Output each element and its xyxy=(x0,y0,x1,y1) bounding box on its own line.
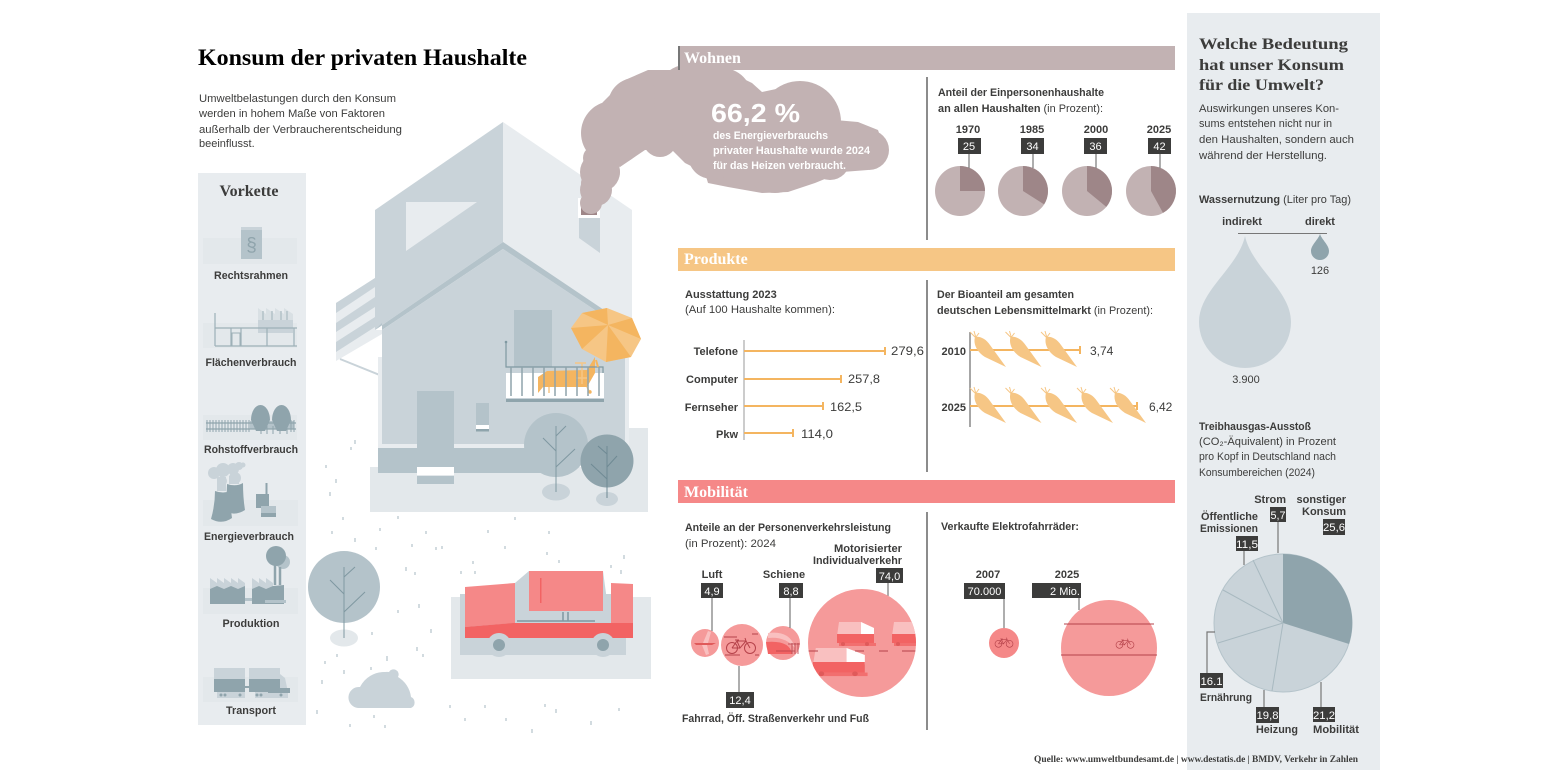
bubble Schiene xyxy=(763,569,805,660)
divider line Mobilität xyxy=(926,512,928,730)
tree small xyxy=(580,434,634,506)
pie 2025: 42 xyxy=(1153,141,1166,153)
carrot chart xyxy=(942,331,1173,427)
label Öffentliche Emissionen: Emissionen xyxy=(1200,523,1258,535)
pie 1985: 34 xyxy=(1026,141,1039,153)
bar Pkw: 114,0 xyxy=(801,427,833,441)
intro text xyxy=(198,93,402,150)
cloud foreground xyxy=(348,669,415,708)
panel intro text xyxy=(1198,103,1354,162)
heading Bioanteil xyxy=(937,289,1153,317)
bubble Luft: 4,9 xyxy=(704,586,720,598)
greenhouse gas text xyxy=(1199,421,1336,479)
back wall left xyxy=(375,122,503,330)
bubble Schiene: Schiene xyxy=(763,569,805,581)
panel intro text: Auswirkungen unseres Kon- xyxy=(1199,103,1339,115)
heading Ausstattung: (Auf 100 Haushalte kommen): xyxy=(685,304,835,316)
bar Telefone xyxy=(694,344,924,358)
icon: Produktion factories xyxy=(203,546,298,614)
pie 1970: 1970 xyxy=(956,124,980,136)
pie 2000 xyxy=(1062,124,1112,216)
bar Fernseher xyxy=(685,400,862,414)
bar chart Ausstattung xyxy=(685,340,924,441)
panel intro text: sums entstehen nicht nur in xyxy=(1199,118,1332,130)
heading Elektrofahrräder: Verkaufte Elektrofahrräder: xyxy=(941,521,1079,533)
panel heading: Welche Bedeutung xyxy=(1199,36,1348,53)
side strip xyxy=(378,357,382,448)
row 2025: 2025 xyxy=(942,402,966,414)
water use chart xyxy=(1199,194,1351,386)
section: Produkte header: Produkte xyxy=(684,251,748,268)
callout: 66,2 %: 66,2 % xyxy=(711,98,800,128)
water use chart: indirekt xyxy=(1222,216,1262,228)
intro text: außerhalb der Verbraucherentscheidung xyxy=(199,124,402,136)
label Strom xyxy=(1254,494,1286,522)
heading Ausstattung: Ausstattung 2023 xyxy=(685,289,777,301)
callout: 66,2 %: privater Haushalte wurde 2024 xyxy=(713,145,871,157)
row 2010 xyxy=(942,331,1114,367)
bar Telefone: 279,6 xyxy=(891,344,924,358)
bubble 2007: 70.000 xyxy=(968,586,1001,598)
bubble 2007 xyxy=(964,569,1019,658)
label sonstiger Konsum xyxy=(1296,494,1347,535)
label sonstiger Konsum: 25,6 xyxy=(1323,522,1345,534)
panel heading: hat unser Konsum xyxy=(1199,57,1345,74)
intro text: beeinflusst. xyxy=(199,138,255,150)
front wall xyxy=(382,249,625,444)
water use chart: 126 xyxy=(1311,265,1329,277)
attic window xyxy=(406,202,477,251)
bubble Luft xyxy=(691,569,723,657)
Vorkette heading: Vorkette xyxy=(220,183,278,200)
label Heizung: 19,8 xyxy=(1256,710,1278,722)
pie 2000: 2000 xyxy=(1084,124,1108,136)
pie 1985 xyxy=(998,124,1048,216)
deck chair xyxy=(538,357,595,394)
panel heading: für die Umwelt? xyxy=(1199,77,1324,94)
bubble 2025 xyxy=(1032,569,1157,696)
label Energieverbrauch: Energieverbrauch xyxy=(204,531,294,543)
balcony door xyxy=(514,310,552,367)
panel: Welche Bedeutung xyxy=(1187,13,1380,770)
label Öffentliche Emissionen: 11,5 xyxy=(1236,539,1258,551)
icon: Rohstoffverbrauch hoppers xyxy=(203,405,297,440)
section: Produkte header xyxy=(678,248,1175,271)
greenhouse gas text: Treibhausgas-Ausstoß xyxy=(1199,421,1311,433)
plinth xyxy=(382,444,557,448)
row 2010: 2010 xyxy=(942,346,966,358)
car illustration xyxy=(451,571,651,679)
label Ernährung: 16.1 xyxy=(1200,676,1222,688)
label Transport: Transport xyxy=(226,705,276,717)
bubble 2025: 2025 xyxy=(1055,569,1079,581)
parasol xyxy=(571,308,641,367)
bubble Fahrrad: 12,4 xyxy=(729,695,751,707)
panel intro text: während der Herstellung. xyxy=(1198,150,1327,162)
balcony xyxy=(505,341,604,402)
callout: 66,2 % xyxy=(711,98,871,172)
bar Pkw xyxy=(716,427,833,441)
greenhouse gas text: pro Kopf in Deutschland nach xyxy=(1199,451,1336,463)
bar Computer: Computer xyxy=(686,374,739,386)
icon: small water drop xyxy=(1311,234,1329,260)
bubble Fahrrad xyxy=(682,624,869,725)
label Ernährung: Ernährung xyxy=(1200,692,1252,704)
label Heizung xyxy=(1256,707,1298,736)
bubble Motorisierter Individualverkehr: Individualverkehr xyxy=(813,555,903,567)
intro text: Umweltbelastungen durch den Konsum xyxy=(199,93,396,105)
bar Computer xyxy=(686,372,880,386)
section: Mobilität header xyxy=(678,480,1175,503)
label Strom: Strom xyxy=(1254,494,1286,506)
divider line Wohnen xyxy=(926,77,928,240)
front door xyxy=(417,391,454,484)
panel: Vorkette xyxy=(198,173,306,725)
greenhouse gas text: (CO₂-Äquivalent) in Prozent xyxy=(1199,436,1336,448)
bar Fernseher: Fernseher xyxy=(685,402,739,414)
icon: large water drop xyxy=(1199,236,1291,368)
label Heizung: Heizung xyxy=(1256,724,1298,736)
icon: Flächenverbrauch factory and fence xyxy=(203,308,297,348)
label Rohstoffverbrauch: Rohstoffverbrauch xyxy=(204,444,298,456)
left awning stripes xyxy=(336,278,382,376)
pie 2025: 2025 xyxy=(1147,124,1171,136)
heading Einpersonenhaushalte: an allen Haushalten (in Prozent): xyxy=(938,103,1103,115)
label Öffentliche Emissionen xyxy=(1200,510,1258,551)
heading Bioanteil: Der Bioanteil am gesamten xyxy=(937,289,1074,301)
heading Personenverkehr: (in Prozent): 2024 xyxy=(685,538,776,550)
heading Personenverkehr: Anteile an der Personenverkehrsleistung xyxy=(685,522,891,534)
pie 1970 xyxy=(935,124,985,216)
pie 1985: 1985 xyxy=(1020,124,1044,136)
row 2025: 6,42 xyxy=(1149,400,1173,414)
label Mobilität: Mobilität xyxy=(1313,724,1359,736)
label Rechtsrahmen: Rechtsrahmen xyxy=(214,270,288,282)
heading Einpersonenhaushalte: Anteil der Einpersonenhaushalte xyxy=(938,87,1104,99)
callout: 66,2 %: für das Heizen verbraucht. xyxy=(713,160,846,172)
panel heading xyxy=(1199,36,1348,94)
water use chart: Wassernutzung (Liter pro Tag) xyxy=(1199,194,1351,206)
smoke cloud xyxy=(580,64,889,214)
pie 2025 xyxy=(1126,124,1176,216)
bubble 2025: 2 Mio. xyxy=(1050,586,1080,598)
pie 2000: 36 xyxy=(1089,141,1102,153)
row 2010: 3,74 xyxy=(1090,344,1114,358)
heading Bioanteil: deutschen Lebensmittelmarkt (in Prozent): xyxy=(937,305,1153,317)
intro text: werden in hohem Maße von Faktoren xyxy=(198,108,385,120)
bubble Motorisierter Individualverkehr: 74,0 xyxy=(879,571,900,583)
pie 1970: 25 xyxy=(963,141,975,153)
scattered ground dots xyxy=(317,440,624,733)
icon: Rechtsrahmen book xyxy=(203,227,297,264)
label sonstiger Konsum: Konsum xyxy=(1302,506,1346,518)
label Öffentliche Emissionen: Öffentliche xyxy=(1201,510,1258,523)
bubble Motorisierter Individualverkehr: Motorisierter xyxy=(834,543,903,555)
label Produktion: Produktion xyxy=(222,618,280,630)
ground plot xyxy=(370,428,648,512)
pie chart greenhouse gas xyxy=(1200,494,1359,736)
roof band xyxy=(375,242,625,330)
water use chart: 3.900 xyxy=(1232,374,1260,386)
tree large xyxy=(524,413,588,500)
bar Computer: 257,8 xyxy=(848,372,880,386)
water use chart: direkt xyxy=(1305,216,1335,228)
small window xyxy=(476,403,489,432)
greenhouse gas text: Konsumbereichen (2024) xyxy=(1199,467,1315,479)
icon: Energieverbrauch cooling towers xyxy=(203,462,298,526)
section: Wohnen header xyxy=(678,46,1175,70)
title: Konsum der privaten Haushalte xyxy=(198,45,527,70)
heading Ausstattung xyxy=(685,289,835,316)
back wall right xyxy=(503,122,632,345)
bubble Schiene: 8,8 xyxy=(783,586,799,598)
callout: 66,2 %: des Energieverbrauchs xyxy=(713,130,828,142)
section: Mobilität header: Mobilität xyxy=(684,484,749,501)
bar Fernseher: 162,5 xyxy=(830,400,862,414)
panel intro text: den Haushalten, sondern auch xyxy=(1199,134,1354,146)
label sonstiger Konsum: sonstiger xyxy=(1296,494,1347,506)
chimney xyxy=(578,198,600,253)
source line: Quelle: www.umweltbundesamt.de | www.destatis.de | BMDV, Verkehr in Zahlen xyxy=(1034,754,1358,764)
heading Einpersonenhaushalte xyxy=(938,87,1104,115)
house illustration xyxy=(336,122,648,512)
label Mobilität xyxy=(1313,707,1359,736)
icon: Rechtsrahmen book: § xyxy=(246,235,257,256)
label Flächenverbrauch: Flächenverbrauch xyxy=(206,357,297,369)
row 2025 xyxy=(942,387,1173,423)
bar Telefone: Telefone xyxy=(694,346,738,358)
bar Pkw: Pkw xyxy=(716,429,738,441)
tree foreground xyxy=(308,551,380,646)
section: Wohnen header: Wohnen xyxy=(684,50,741,67)
heading Personenverkehr xyxy=(685,522,891,550)
icon: Transport trucks xyxy=(203,668,298,702)
bubble 2007: 2007 xyxy=(976,569,1000,581)
label Mobilität: 21,2 xyxy=(1313,710,1335,722)
label Strom: 5,7 xyxy=(1270,510,1286,522)
bubble Luft: Luft xyxy=(702,569,723,581)
bubble Motorisierter Individualverkehr xyxy=(808,544,916,697)
label Ernährung xyxy=(1200,673,1252,704)
bubble Fahrrad: Fahrrad, Öff. Straßenverkehr und Fuß xyxy=(682,712,869,725)
divider line Produkte xyxy=(926,280,928,472)
